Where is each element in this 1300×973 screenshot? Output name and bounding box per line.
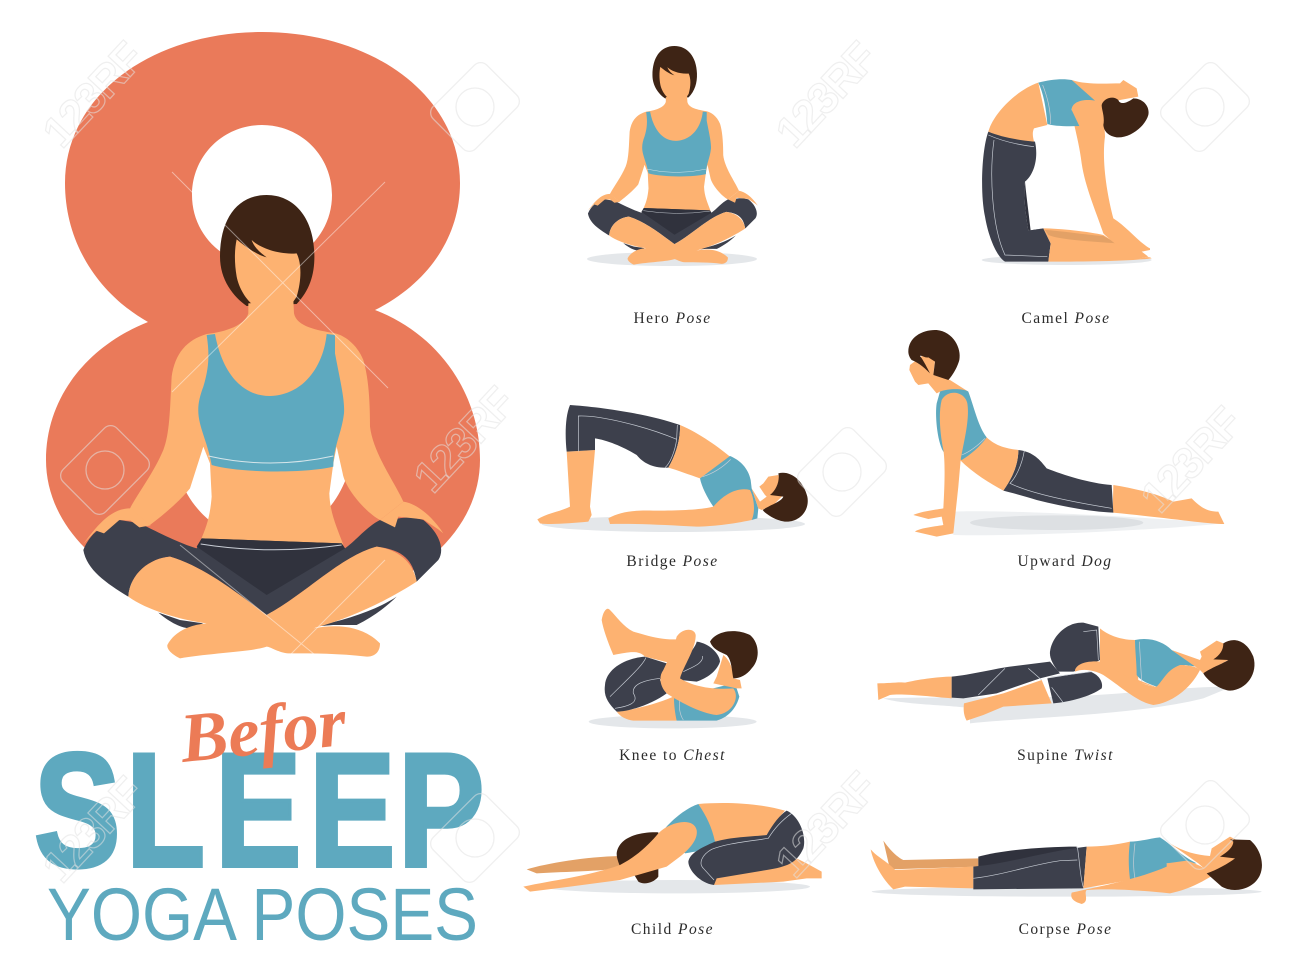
title words YOGA POSES: YOGA POSES [47,873,478,956]
watermark overlay: 123RF [33,767,155,892]
bra stitching [208,456,333,463]
pose: camel [982,79,1152,327]
pose: supine twist [877,623,1254,764]
hero shadow [587,252,757,266]
child figure [523,803,822,893]
big orange number 8 [46,32,480,612]
supine twist label: Supine Twist [1017,747,1114,764]
waist stitching [201,544,342,550]
lower calves [158,597,397,628]
pose: knee to chest [589,609,758,764]
crossed legs and feet [128,547,417,658]
capri leggings [83,518,441,615]
pose: bridge [537,405,808,570]
title word SLEEP: SLEEP [34,720,484,901]
watermark overlay: 123RF [766,32,888,157]
supine twist figure [877,623,1254,723]
knee to chest label: Knee to Chest [619,747,726,764]
sports bra [198,334,344,471]
pose: child [523,803,822,938]
pose: hero [587,46,758,327]
camel figure [982,79,1152,265]
title word Befor: Befor [176,684,351,778]
hero figure [588,46,758,265]
shorts centre shade [197,538,345,595]
bridge label: Bridge Pose [626,553,719,570]
main seated lotus figure [83,195,443,658]
hair [220,195,314,306]
watermark overlay: 123RF [1131,397,1253,522]
hero label: Hero Pose [633,310,712,327]
child label: Child Pose [631,921,714,938]
corpse label: Corpse Pose [1019,921,1112,938]
watermark overlay: 123RF [766,762,888,887]
face [235,239,300,312]
title [34,684,484,956]
hands on knees [83,502,443,544]
pose: corpse [871,837,1262,938]
upward dog figure [908,330,1224,537]
pose: upward dog [908,330,1224,570]
knee to chest figure [589,609,758,728]
corpse figure [871,837,1262,904]
bridge figure [537,405,808,532]
camel label: Camel Pose [1022,310,1110,327]
upward dog label: Upward Dog [1017,553,1113,570]
watermark overlay: 123RF [404,377,526,502]
watermark overlay: 123RF [33,32,155,157]
torso and arms [130,300,403,545]
